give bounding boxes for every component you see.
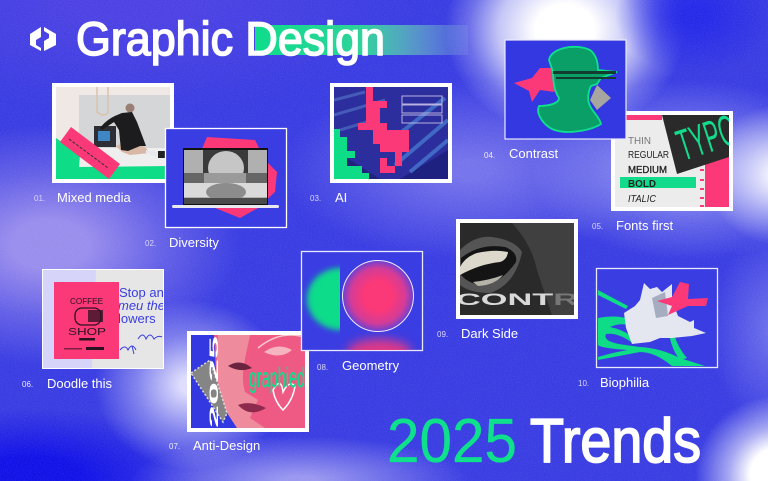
label 08: 08. [317, 363, 328, 372]
label 04: 04. [484, 151, 495, 160]
panel 06: doodle this: Stop and [119, 285, 171, 300]
label 01: 01. [34, 194, 45, 203]
logo icon [30, 27, 56, 51]
label 08 [317, 358, 400, 373]
panel 09: dark side [456, 219, 578, 319]
label 04: Contrast [509, 146, 559, 161]
label 10: 10. [578, 379, 589, 388]
panel 05: fonts first [611, 111, 733, 211]
label 04 [484, 146, 559, 161]
panel 07: anti-design: graphied [249, 362, 305, 393]
panel 01: mixed media [52, 83, 174, 183]
label 01: Mixed media [57, 190, 131, 205]
label 07: Anti-Design [193, 438, 260, 453]
label 09: 09. [437, 330, 448, 339]
label 06: Doodle this [47, 376, 113, 391]
panel 04: contrast [505, 40, 626, 139]
label 08: Geometry [342, 358, 400, 373]
poster: coffee shop [54, 282, 119, 359]
label 09: Dark Side [461, 326, 518, 341]
label 10 [578, 375, 650, 390]
panel 07: anti-design [187, 331, 309, 432]
label 02: 02. [145, 239, 156, 248]
panel 06: doodle this [42, 270, 171, 368]
label 03: 03. [310, 194, 321, 203]
label 02: Diversity [169, 235, 219, 250]
panel 10: biophilia [596, 268, 718, 368]
panel 06: doodle this: meu the [118, 298, 165, 313]
label 07: 07. [169, 442, 180, 451]
label 03: AI [335, 190, 347, 205]
poster: coffee shop: COFFEE [70, 296, 103, 306]
title: Graphic Design: Graphic Design [76, 12, 385, 65]
panel 06: doodle this: lowers [118, 311, 156, 326]
panel 05: fonts first: MEDIUM [628, 165, 667, 176]
title: 2025 Trends: Trends [530, 407, 701, 476]
panel 05: fonts first: THIN [628, 136, 651, 147]
panel 03: AI [330, 83, 452, 183]
poster: coffee shop: SHOP [68, 326, 106, 338]
title: 2025 Trends: 2025 [387, 407, 517, 476]
panel 09: dark side: CONT R [456, 290, 578, 309]
label 05: 05. [592, 222, 603, 231]
panel 05: fonts first: BOLD [628, 179, 656, 190]
label 10: Biophilia [600, 375, 650, 390]
label 02 [145, 235, 219, 250]
panel 07: anti-design: 2025 [207, 335, 221, 428]
label 06: 06. [22, 380, 33, 389]
panel 08: geometry [302, 252, 422, 365]
panel 05: fonts first: ITALIC [628, 194, 657, 205]
label 05: Fonts first [616, 218, 673, 233]
label 03 [310, 190, 347, 205]
panel 05: fonts first: REGULAR [628, 150, 669, 161]
panel 02: diversity [166, 128, 286, 228]
panel 05: fonts first: TYPO [671, 106, 743, 171]
title: 2025 Trends [387, 407, 701, 476]
